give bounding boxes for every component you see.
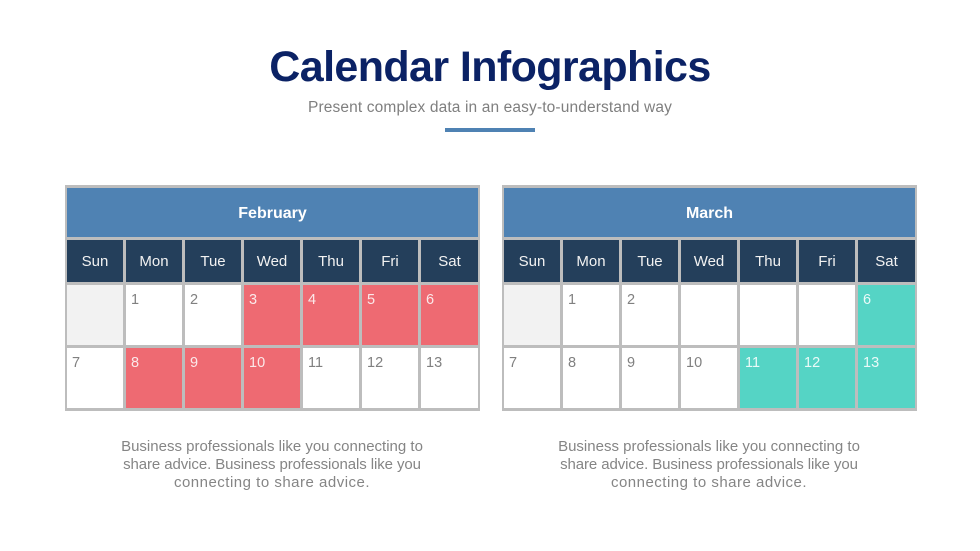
- day 13: [421, 348, 478, 408]
- month heading: February: February: [238, 205, 307, 222]
- day 1: 1: [131, 292, 139, 308]
- text block: February description: connecting to share advice.: [174, 474, 370, 491]
- day 6 highlighted: 6: [426, 292, 434, 308]
- day 10: [681, 348, 737, 408]
- day 6 highlighted: [421, 285, 478, 345]
- day 10: 10: [686, 355, 702, 371]
- day 7: [504, 348, 560, 408]
- weekday: Sun: [504, 240, 560, 282]
- weekday: Mon: Mon: [139, 253, 169, 270]
- weekday: Wed: Wed: [694, 253, 724, 270]
- weekday: Thu: Thu: [755, 253, 781, 270]
- weekday: Tue: Tue: [637, 253, 663, 270]
- month heading: February: [67, 188, 478, 237]
- day 11: [303, 348, 359, 408]
- weekday: Sat: Sat: [438, 253, 461, 270]
- day 4 highlighted: [303, 285, 359, 345]
- day 7: 7: [72, 355, 80, 371]
- day 2: [185, 285, 241, 345]
- weekday: Sun: Sun: [82, 253, 108, 270]
- weekday: Sat: [858, 240, 915, 282]
- day 9: [622, 348, 678, 408]
- day 3 highlighted: [244, 285, 300, 345]
- day 12: 12: [367, 355, 383, 371]
- month heading: March: March: [686, 205, 733, 222]
- weekday: Wed: Wed: [257, 253, 287, 270]
- weekday: Fri: Fri: [381, 253, 399, 270]
- day 10 highlighted: [244, 348, 300, 408]
- text block: March description: share advice. Business professionals like you: [560, 456, 858, 473]
- day 5 highlighted: [362, 285, 418, 345]
- weekday: Tue: Tue: [200, 253, 226, 270]
- weekday: Mon: [563, 240, 619, 282]
- weekday: Wed: [244, 240, 300, 282]
- day 8 highlighted: [126, 348, 182, 408]
- day 11: 11: [308, 355, 323, 371]
- text block: March description: Business professionals like you connecting to: [558, 438, 860, 455]
- day 11 highlighted: 11: [745, 355, 760, 371]
- weekday: Mon: [126, 240, 182, 282]
- day 2: 2: [627, 292, 635, 308]
- day 13 highlighted: 13: [863, 355, 879, 371]
- day 2: [622, 285, 678, 345]
- empty day cell: [67, 285, 123, 345]
- day 4 highlighted: 4: [308, 292, 316, 308]
- text block: February description: share advice. Business professionals like you: [123, 456, 421, 473]
- panel: February calendar: [65, 185, 480, 411]
- weekday: Fri: [362, 240, 418, 282]
- day 8: [563, 348, 619, 408]
- day 5 highlighted: 5: [367, 292, 375, 308]
- day 6 highlighted: [858, 285, 915, 345]
- day 1: [563, 285, 619, 345]
- weekday: Sat: [421, 240, 478, 282]
- blank day cell: [799, 285, 855, 345]
- blank day cell: [681, 285, 737, 345]
- panel: March calendar: [502, 185, 917, 411]
- weekday: Wed: [681, 240, 737, 282]
- day 13 highlighted: [858, 348, 915, 408]
- text block: March description: connecting to share advice.: [611, 474, 807, 491]
- weekday: Fri: Fri: [818, 253, 836, 270]
- day 12: [362, 348, 418, 408]
- subtitle: Present complex data in an easy-to-understand way: [308, 99, 672, 116]
- day 9 highlighted: 9: [190, 355, 198, 371]
- weekday: Thu: [740, 240, 796, 282]
- day 11 highlighted: [740, 348, 796, 408]
- day 12 highlighted: 12: [804, 355, 820, 371]
- day 1: 1: [568, 292, 576, 308]
- weekday: Tue: [185, 240, 241, 282]
- day 7: 7: [509, 355, 517, 371]
- weekday: Sat: Sat: [875, 253, 898, 270]
- title: Calendar Infographics: [269, 43, 711, 91]
- day 10 highlighted: 10: [249, 355, 265, 371]
- day 3 highlighted: 3: [249, 292, 257, 308]
- weekday: Sun: Sun: [519, 253, 545, 270]
- day 9 highlighted: [185, 348, 241, 408]
- weekday: Thu: [303, 240, 359, 282]
- day 1: [126, 285, 182, 345]
- day 9: 9: [627, 355, 635, 371]
- weekday: Thu: Thu: [318, 253, 344, 270]
- weekday: Sun: [67, 240, 123, 282]
- weekday: Fri: [799, 240, 855, 282]
- weekday: Mon: Mon: [576, 253, 606, 270]
- blank day cell: [740, 285, 796, 345]
- accent rule: [445, 128, 535, 132]
- day 13: 13: [426, 355, 442, 371]
- text block: February description: Business professionals like you connecting to: [121, 438, 423, 455]
- day 2: 2: [190, 292, 198, 308]
- month heading: March: [504, 188, 915, 237]
- empty day cell: [504, 285, 560, 345]
- day 8 highlighted: 8: [131, 355, 139, 371]
- day 12 highlighted: [799, 348, 855, 408]
- text block: February description: [121, 438, 423, 491]
- weekday: Tue: [622, 240, 678, 282]
- day 6 highlighted: 6: [863, 292, 871, 308]
- day 7: [67, 348, 123, 408]
- text block: March description: [558, 438, 860, 491]
- day 8: 8: [568, 355, 576, 371]
